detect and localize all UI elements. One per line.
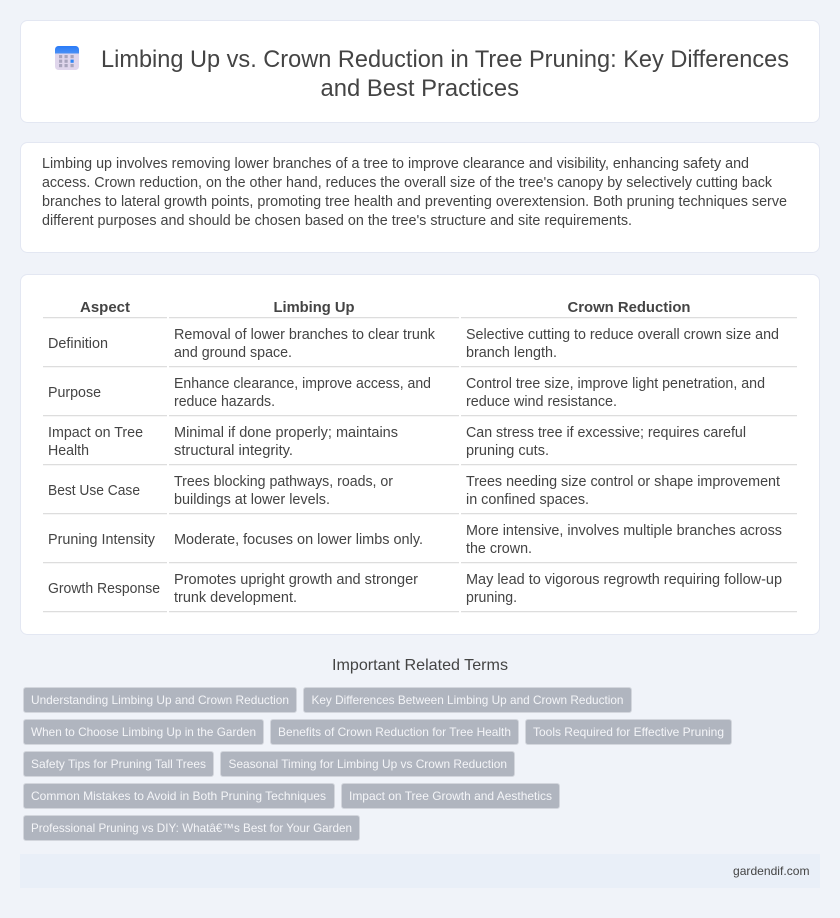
tag: Seasonal Timing for Limbing Up vs Crown Reduction	[228, 757, 507, 771]
row: pruning intensity: the crown.	[466, 541, 532, 557]
row: best use case	[48, 474, 780, 508]
row: definition: branch length.	[466, 345, 557, 361]
row: purpose: reduce wind resistance.	[466, 394, 617, 410]
row: definition: Selective cutting to reduce overall crown size and	[466, 327, 779, 343]
row: best use case: in confined spaces.	[466, 492, 589, 508]
row: pruning intensity	[48, 523, 782, 557]
row: growth response: Promotes upright growth and stronger	[174, 572, 418, 588]
row: purpose: Purpose	[48, 385, 101, 401]
panel: introduction paragraph: branches to lateral growth points, promoting tree health and preventing overextension. Both pruning techniques serve	[42, 194, 787, 210]
table header: Limbing Up	[274, 300, 355, 316]
row: definition: and ground space.	[174, 345, 292, 361]
row: pruning intensity: Moderate, focuses on lower limbs only.	[174, 532, 423, 548]
row: growth response: May lead to vigorous regrowth requiring follow-up	[466, 572, 782, 588]
table header	[80, 300, 690, 316]
tag: Tools Required for Effective Pruning	[533, 725, 724, 739]
tag	[24, 752, 214, 776]
panel: header	[20, 20, 820, 122]
row: impact on tree health: pruning cuts.	[466, 443, 549, 459]
panel: introduction paragraph: Limbing up involves removing lower branches of a tree to improve clearance and visibility, enhancing safety and	[42, 156, 749, 172]
tag	[24, 688, 296, 712]
table header: Crown Reduction	[568, 300, 690, 316]
title	[101, 46, 789, 102]
row: impact on tree health: Minimal if done properly; maintains	[174, 425, 398, 441]
row: definition	[48, 327, 779, 361]
tag: When to Choose Limbing Up in the Garden	[31, 725, 256, 739]
row: best use case: Trees blocking pathways, roads, or	[174, 474, 393, 490]
tag	[526, 720, 732, 744]
icon: calendar	[55, 46, 79, 70]
tag	[220, 752, 514, 776]
row: best use case: Trees needing size control or shape improvement	[466, 474, 780, 490]
row: pruning intensity: More intensive, involves multiple branches across	[466, 523, 782, 539]
panel: comparison table	[20, 274, 820, 634]
row: best use case: Best Use Case	[48, 483, 140, 499]
panel: introduction paragraph: access. Crown reduction, on the other hand, reduces the overall size of the tree's canopy by selectively cutting back	[42, 175, 773, 191]
tag: Impact on Tree Growth and Aesthetics	[349, 789, 552, 803]
row: purpose: Control tree size, improve light penetration, and	[466, 376, 765, 392]
tag	[304, 688, 632, 712]
footer: gardendif.com	[733, 864, 810, 878]
tag: Benefits of Crown Reduction for Tree Health	[278, 725, 511, 739]
row: pruning intensity: Pruning Intensity	[48, 532, 156, 548]
row: growth response: trunk development.	[174, 590, 297, 606]
row: best use case: buildings at lower levels.	[174, 492, 330, 508]
row: growth response	[48, 572, 782, 606]
tag list: related terms	[24, 688, 732, 840]
row: definition: Removal of lower branches to clear trunk	[174, 327, 436, 343]
table header: Aspect	[80, 300, 130, 316]
row: growth response: pruning.	[466, 590, 517, 606]
tag: Understanding Limbing Up and Crown Reduction	[31, 693, 289, 707]
heading: important related terms: Important Related Terms	[332, 657, 508, 674]
footer	[20, 854, 820, 888]
row: impact on tree health: Health	[48, 443, 89, 459]
panel: introduction paragraph	[20, 142, 820, 252]
row: impact on tree health	[48, 425, 746, 459]
panel: introduction paragraph: different purposes and should be chosen based on the tree's structure and site requirements.	[42, 213, 632, 229]
row: definition: Definition	[48, 336, 108, 352]
title: Limbing Up vs. Crown Reduction in Tree Pruning: Key Differences	[101, 46, 789, 73]
tag	[270, 720, 518, 744]
row: growth response: Growth Response	[48, 581, 160, 597]
tag	[24, 784, 334, 808]
tag: Key Differences Between Limbing Up and Crown Reduction	[312, 693, 624, 707]
tag: Safety Tips for Pruning Tall Trees	[31, 757, 206, 771]
row: purpose: reduce hazards.	[174, 394, 275, 410]
row: impact on tree health: Can stress tree if excessive; requires careful	[466, 425, 746, 441]
tag: Common Mistakes to Avoid in Both Pruning Techniques	[31, 789, 326, 803]
tag	[24, 720, 264, 744]
tag	[24, 816, 360, 840]
row: purpose	[48, 376, 765, 410]
row: impact on tree health: structural integrity.	[174, 443, 293, 459]
tag: Professional Pruning vs DIY: Whatâ€™s Best for Your Garden	[31, 821, 352, 835]
title: and Best Practices	[320, 75, 519, 102]
row: impact on tree health: Impact on Tree	[48, 425, 143, 441]
row: purpose: Enhance clearance, improve access, and	[174, 376, 431, 392]
tag	[342, 784, 560, 808]
